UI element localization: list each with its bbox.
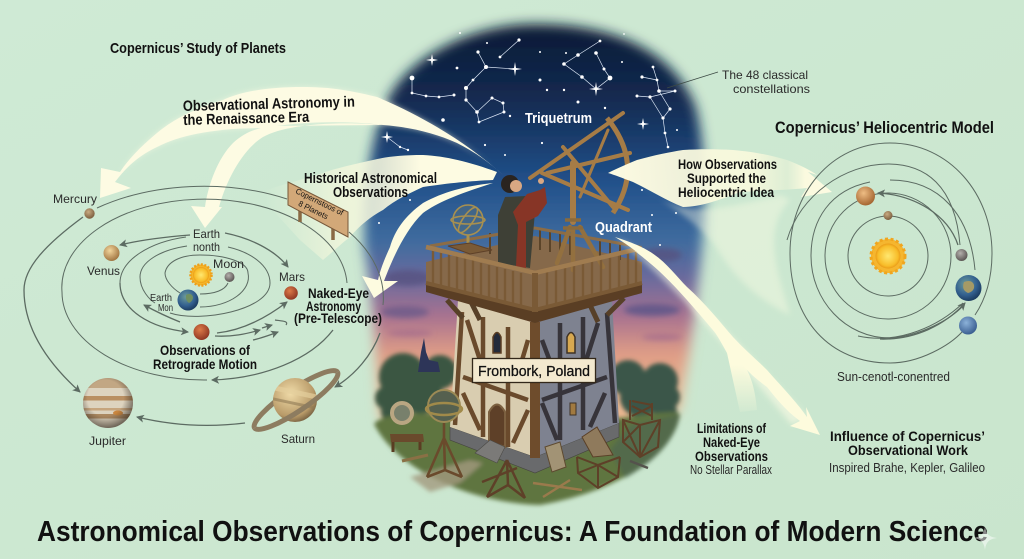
icon: quadrant on crate	[577, 427, 620, 488]
label: historical observations	[304, 171, 437, 201]
arrow: renaissance era band to Mercury	[100, 87, 503, 198]
planet labels: Earth	[150, 293, 172, 304]
right wall timber frame	[542, 313, 615, 440]
wooden sign: Copernstoos of	[294, 187, 345, 218]
windows and door	[493, 332, 501, 353]
tripod of triquetrum	[557, 227, 603, 270]
label: limitations: Observations	[695, 448, 768, 464]
icon: sun	[190, 264, 212, 286]
label: constellations	[722, 68, 810, 96]
planet: saturn	[252, 368, 340, 432]
label: influence: Observational Work	[848, 442, 968, 458]
label: triquetrum: Triquetrum	[525, 111, 592, 127]
armillary sphere	[448, 205, 492, 254]
wooden sign	[288, 182, 348, 240]
label: limitations: Naked-Eye	[703, 434, 760, 450]
Copernicus	[498, 175, 547, 268]
label: limitations: Limitations of	[697, 420, 766, 436]
corner post	[530, 322, 540, 458]
label: historical observations: Historical Astronomical	[304, 171, 437, 187]
distant church spire	[418, 338, 440, 372]
heading: heliocentric model: Copernicus’ Heliocentric Model	[775, 119, 994, 137]
icon: ring dial	[390, 403, 424, 452]
planet labels: nonth	[193, 240, 220, 254]
planet labels: Jupiter	[89, 434, 126, 448]
left trees	[375, 353, 457, 424]
leader line	[667, 72, 718, 88]
arrow: to influence	[615, 237, 820, 435]
label: naked-eye astronomy: (Pre-Telescope)	[294, 310, 382, 326]
central scene: night sky vignette	[364, 24, 718, 440]
deck boards	[426, 236, 642, 310]
back railing	[490, 229, 620, 260]
icon: leaning panel	[545, 442, 566, 472]
entrance steps	[475, 440, 505, 463]
label: observations of retrograde motion	[153, 342, 257, 372]
planet: retrograde observed planet	[194, 324, 210, 340]
panel: heliocentric model	[787, 143, 992, 363]
balcony floor	[426, 283, 642, 323]
arrow: historical observations band	[257, 155, 497, 260]
triquetrum instrument	[530, 113, 630, 228]
icon: central sun	[871, 239, 905, 273]
planet labels: Mars	[279, 270, 305, 284]
label: constellations: constellations	[733, 82, 810, 96]
panel: planet orbits	[24, 182, 383, 448]
arrow: to Earth	[191, 123, 383, 228]
arrow glow	[110, 87, 807, 425]
label: observations of retrograde motion: Observations of	[160, 342, 250, 358]
planet: mercury	[84, 208, 95, 219]
brackets under balcony	[447, 298, 624, 322]
planet: jupiter	[83, 378, 133, 428]
heading: study of planets: Copernicus’ Study of Planets	[110, 40, 286, 57]
location label	[472, 358, 596, 382]
planet: venus	[856, 186, 875, 206]
heliocentric orbits	[787, 143, 992, 363]
dusk clouds	[381, 248, 682, 340]
planet: earth	[956, 275, 982, 301]
orbit lines	[24, 186, 383, 425]
icon: sparkle watermark	[973, 526, 997, 550]
label: observations of retrograde motion: Retrograde Motion	[153, 356, 257, 372]
planet labels	[53, 192, 315, 448]
planet: mercury	[884, 211, 892, 220]
left wall	[450, 300, 535, 457]
label: how observations supported: How Observations	[678, 156, 777, 172]
planet labels: Mercury	[53, 192, 97, 206]
planet labels: Venus	[87, 264, 120, 278]
ground instruments	[390, 390, 660, 498]
planet labels: Mon	[158, 303, 173, 314]
label: historical observations: Observations	[333, 185, 408, 201]
label: limitations: No Stellar Parallax	[690, 463, 773, 477]
constellations	[378, 32, 718, 246]
icon: armillary on tripod	[426, 390, 462, 477]
label: quadrant: Quadrant	[595, 220, 652, 236]
label: how observations supported	[678, 156, 777, 200]
label: influence: Influence of Copernicus’	[830, 428, 985, 444]
label: how observations supported: Supported the	[687, 170, 766, 186]
icon: small tool	[630, 461, 648, 468]
arrow: to heliocentric model	[608, 149, 832, 207]
label: sun-centred caption: Sun-cenotl-conentred	[837, 370, 950, 384]
stone base	[450, 423, 619, 473]
label: how observations supported: Heliocentric Idea	[678, 184, 774, 200]
icon: small plank	[402, 455, 428, 461]
planet: venus	[104, 245, 120, 261]
planet: moon	[956, 249, 968, 261]
location label: Frombork, Poland	[478, 363, 590, 380]
observer on balcony	[426, 113, 642, 312]
front railing	[433, 250, 636, 307]
label: observational astronomy: Observational Astronomy in	[183, 94, 355, 115]
label: observational astronomy: the Renaissance Era	[183, 109, 310, 129]
planet: moon	[224, 272, 234, 282]
label: naked-eye astronomy	[294, 285, 382, 326]
ground with trees	[374, 338, 680, 505]
arrows	[100, 87, 832, 435]
label: limitations	[690, 420, 773, 477]
wooden sign: 8 Planets	[297, 199, 330, 221]
planet labels: Saturn	[281, 432, 315, 446]
icon: small tripod	[482, 460, 525, 498]
planet: mars	[284, 286, 298, 300]
planet: blue	[959, 316, 977, 334]
arrow: to naked-eye astronomy	[362, 183, 493, 298]
left wall timber frame	[455, 312, 528, 447]
label: observational astronomy	[183, 94, 355, 129]
right wall	[535, 300, 619, 457]
label: constellations: The 48 classical	[722, 68, 808, 82]
arrow: to limitations	[633, 250, 757, 412]
label: naked-eye astronomy: Naked-Eye	[308, 285, 369, 301]
right trees	[610, 360, 680, 424]
planet labels: Moon	[213, 257, 244, 271]
icon: crate frame	[623, 400, 660, 457]
tower	[426, 283, 642, 473]
planet labels: Earth	[193, 227, 220, 241]
label: naked-eye astronomy: Astronomy	[306, 298, 361, 314]
icon: wooden beams	[533, 480, 582, 497]
planet: earth	[178, 290, 198, 310]
label: influence: Inspired Brahe, Kepler, Galileo	[829, 461, 985, 475]
label: influence	[829, 428, 985, 475]
